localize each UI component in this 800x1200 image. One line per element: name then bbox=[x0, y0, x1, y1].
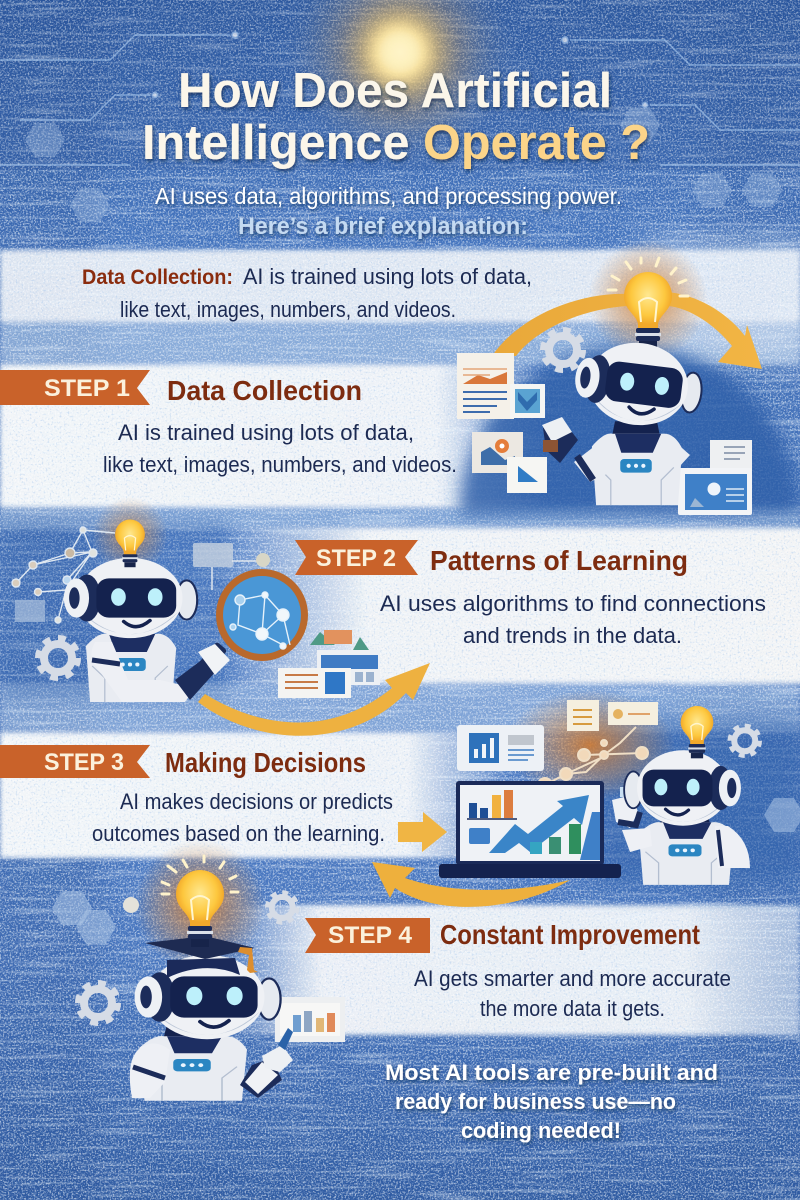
icon: gear bbox=[39, 639, 77, 677]
step 1 ribbon: STEP 1 bbox=[44, 375, 130, 402]
subtitle: Here’s a brief explanation: bbox=[238, 213, 528, 240]
step 3 text bbox=[92, 789, 393, 846]
step 1 text: like text, images, numbers, and videos. bbox=[103, 452, 457, 477]
closing callout bbox=[385, 1060, 718, 1143]
intro text block: Data Collection: bbox=[82, 266, 233, 289]
trend nodes bbox=[538, 727, 648, 792]
arrow: step 1 curved arrow bbox=[492, 292, 762, 369]
step 4 text: AI gets smarter and more accurate bbox=[414, 966, 731, 991]
subtitle bbox=[155, 183, 622, 240]
step 2 heading: Patterns of Learning bbox=[430, 545, 688, 576]
step 3 text: AI makes decisions or predicts bbox=[120, 789, 393, 814]
network diagram bbox=[12, 527, 115, 623]
closing callout: Most AI tools are pre-built and bbox=[385, 1060, 718, 1085]
icon: gear bbox=[730, 726, 759, 755]
data cards bbox=[457, 353, 752, 515]
data cards bbox=[278, 630, 380, 698]
step 4 text: the more data it gets. bbox=[480, 996, 665, 1021]
step 3 text: outcomes based on the learning. bbox=[92, 821, 385, 846]
step 1 heading: Data Collection bbox=[167, 375, 362, 406]
subtitle: AI uses data, algorithms, and processing power. bbox=[155, 183, 622, 209]
intro text block: like text, images, numbers, and videos. bbox=[120, 297, 456, 322]
step 2 ribbon: STEP 2 bbox=[316, 545, 396, 572]
robot 4 bbox=[130, 856, 293, 1101]
arrow: step 3 right arrow bbox=[398, 812, 447, 852]
panel: step 4 illustration bbox=[52, 840, 345, 1101]
icons: hexagons and gears bbox=[52, 891, 296, 1022]
step 1 ribbon bbox=[0, 370, 150, 405]
icon: magnifier bbox=[187, 569, 308, 686]
intro text block: AI is trained using lots of data, bbox=[243, 264, 532, 289]
icon: lightbulb bbox=[162, 856, 238, 947]
robot 1 bbox=[542, 336, 707, 505]
title: How Does Artificial bbox=[178, 64, 612, 118]
step 2 text: AI uses algorithms to find connections bbox=[380, 591, 766, 616]
icon: graduation cap bbox=[145, 936, 258, 978]
icon: lightbulb bbox=[608, 258, 688, 349]
step 1 text bbox=[103, 420, 457, 477]
step 4 ribbon: STEP 4 bbox=[328, 922, 413, 949]
step 4 text bbox=[414, 966, 731, 1021]
step 4 heading: Constant Improvement bbox=[440, 919, 700, 950]
closing callout: coding needed! bbox=[461, 1118, 621, 1143]
arrow: step 3 curved arrow bbox=[372, 862, 570, 907]
chart card bbox=[275, 997, 345, 1042]
step 4 ribbon bbox=[305, 918, 430, 953]
step 3 ribbon bbox=[0, 745, 150, 778]
intro text block bbox=[82, 264, 532, 322]
closing callout: ready for business use—no bbox=[395, 1089, 676, 1114]
step 2 text: and trends in the data. bbox=[463, 623, 682, 648]
step 3 heading: Making Decisions bbox=[165, 747, 366, 778]
icon: laptop bbox=[439, 781, 621, 878]
title bbox=[142, 64, 650, 170]
notes bbox=[457, 700, 658, 771]
panel: step 3 illustration bbox=[372, 690, 800, 907]
header circuit decoration bbox=[0, 32, 800, 222]
step 1 text: AI is trained using lots of data, bbox=[118, 420, 414, 445]
arrow: step 2 curved arrow bbox=[198, 663, 430, 736]
robot 3 bbox=[612, 706, 750, 885]
panel: step 1 illustration bbox=[457, 240, 800, 515]
robot 2 bbox=[64, 519, 230, 702]
title: Intelligence Operate ? bbox=[142, 116, 650, 170]
step 3 ribbon: STEP 3 bbox=[44, 749, 124, 776]
icon: gear bbox=[544, 331, 582, 369]
step 2 text bbox=[380, 591, 766, 648]
step 2 ribbon bbox=[295, 540, 418, 575]
panel: step 2 illustration bbox=[0, 497, 430, 736]
